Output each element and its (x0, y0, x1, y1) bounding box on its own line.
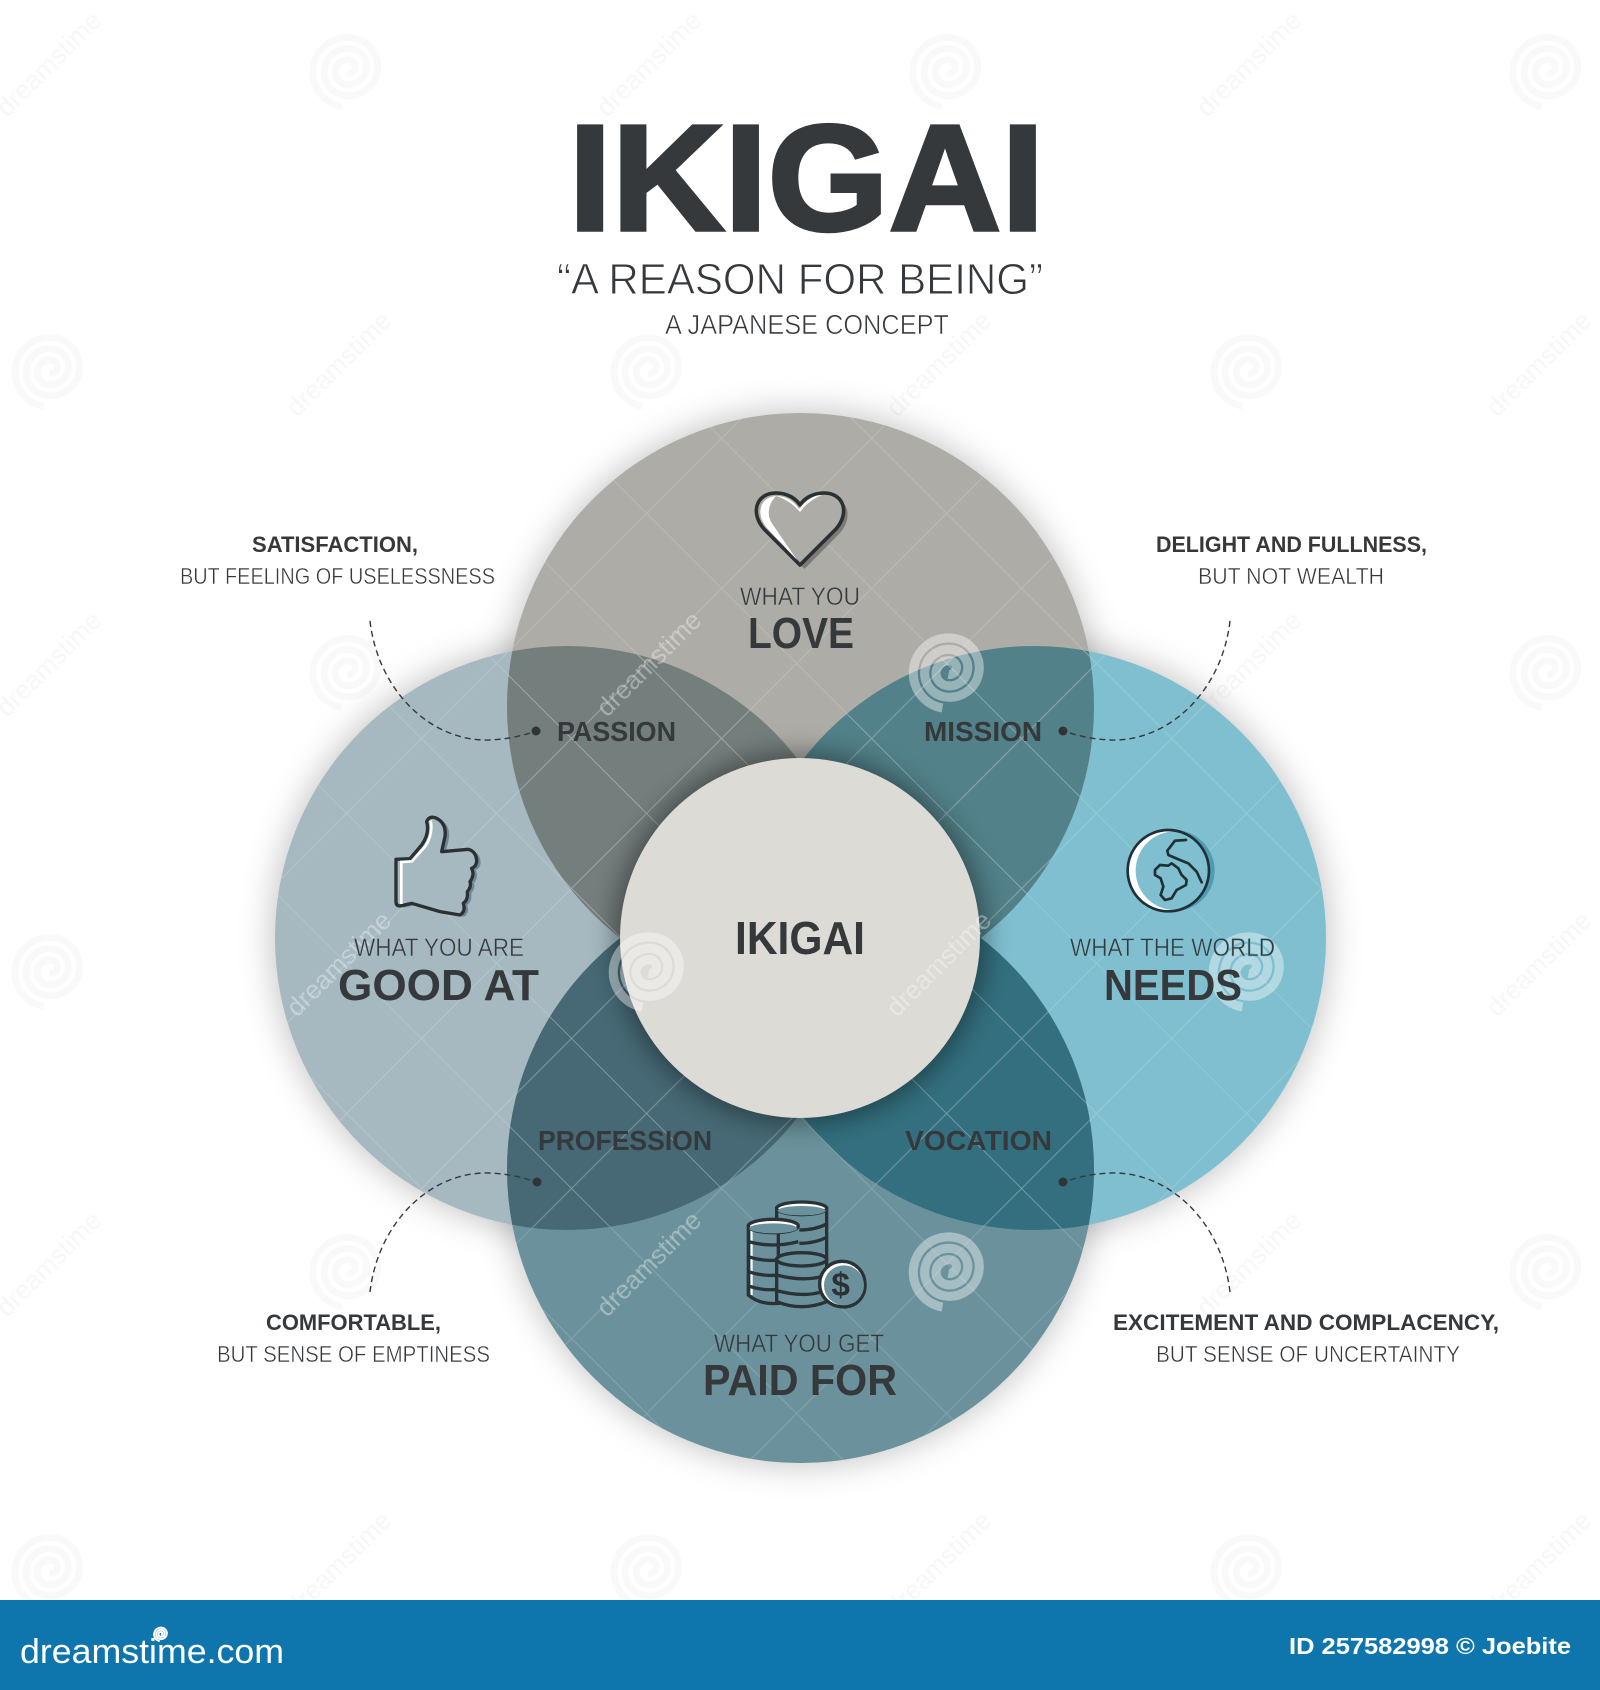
label: what the world: WHAT THE WORLD (1070, 934, 1275, 962)
footer credit: ID 257582998 © Joebite (1289, 1633, 1571, 1659)
diagram text watermarks: dreamstime (590, 1205, 707, 1322)
diagram watermark lines (508, 418, 1092, 938)
diagram watermark lines bottom (510, 984, 1090, 1460)
page watermark pattern: dreamstime (1190, 1205, 1307, 1322)
connector (370, 1173, 542, 1292)
label: what you: WHAT YOU (740, 583, 860, 611)
circle: what you are good at (275, 646, 859, 1230)
overlap label: vocation: VOCATION (905, 1125, 1052, 1156)
dollar coin: $ (831, 1267, 850, 1304)
title: IKIGAI (568, 93, 1044, 262)
icon: globe (1128, 830, 1215, 911)
overlap: profession (507, 938, 796, 1230)
page watermark pattern: dreamstime (880, 1505, 997, 1622)
page watermark pattern: dreamstime (280, 305, 397, 422)
circle: what the world needs (742, 646, 1326, 1230)
page watermark pattern: dreamstime (1480, 905, 1597, 1022)
panel: what you love (740, 493, 860, 658)
page watermark pattern: dreamstime (1190, 5, 1307, 122)
panel: what the world needs (1070, 830, 1275, 1010)
callout heading: EXCITEMENT AND COMPLACENCY, (1113, 1310, 1499, 1335)
footer logo: dreamstime.com (20, 1633, 284, 1671)
label: good at: GOOD AT (338, 961, 539, 1010)
connector (370, 621, 540, 740)
label: paid for: PAID FOR (703, 1356, 897, 1405)
label: what you get: WHAT YOU GET (714, 1330, 884, 1358)
callout body: BUT SENSE OF UNCERTAINTY (1156, 1341, 1460, 1367)
callout heading: DELIGHT AND FULLNESS, (1156, 532, 1427, 557)
diagram text watermarks (280, 605, 997, 1322)
icon: thumbs up (396, 817, 481, 917)
callout body: BUT FEELING OF USELESSNESS (180, 563, 495, 589)
callout: delight (1058, 532, 1427, 740)
panel: what you are good at (338, 817, 539, 1010)
page watermark pattern: dreamstime (590, 5, 707, 122)
callout body: BUT NOT WEALTH (1198, 563, 1384, 589)
center circle (620, 758, 980, 1118)
front coin stack (777, 1253, 827, 1307)
overlap: vocation (804, 938, 1094, 1230)
diagram text watermarks: dreamstime (280, 905, 397, 1022)
diagram text watermarks: dreamstime (590, 605, 707, 722)
page watermark pattern: dreamstime (1190, 605, 1307, 722)
overlap: passion (507, 646, 797, 938)
connector (1058, 621, 1230, 740)
diagram spiral watermarks (608, 632, 1284, 1312)
page watermark pattern: dreamstime (880, 305, 997, 422)
subtitle: “A REASON FOR BEING” (557, 255, 1043, 304)
panel: what you get paid for (703, 1202, 897, 1405)
tagline: A JAPANESE CONCEPT (665, 309, 949, 340)
diagram watermark lines left (278, 652, 792, 1228)
page watermark pattern: dreamstime (1480, 1505, 1597, 1622)
overlap label: profession: PROFESSION (538, 1125, 712, 1156)
center label: IKIGAI (735, 912, 865, 964)
label: needs: NEEDS (1104, 961, 1242, 1010)
circle: what you love (507, 413, 1094, 1000)
overlap label: passion: PASSION (557, 716, 676, 747)
callout body: BUT SENSE OF EMPTINESS (217, 1341, 490, 1367)
page watermark pattern: dreamstime (1480, 305, 1597, 422)
label: love: LOVE (748, 609, 854, 658)
footer bar (0, 1600, 1600, 1690)
icon: coin stacks (748, 1202, 867, 1309)
diagram watermark lines right (817, 650, 1322, 1229)
left coin stack (748, 1219, 798, 1304)
center circle shadow (614, 752, 986, 1124)
callout heading: SATISFACTION, (252, 532, 418, 557)
overlap label: mission: MISSION (924, 716, 1042, 747)
diagram text watermarks: dreamstime (880, 905, 997, 1022)
callout: satisfaction (180, 532, 540, 740)
callout: excitement (1058, 1173, 1499, 1367)
venn circle shadows (271, 410, 1330, 1466)
callout: comfortable (217, 1173, 542, 1367)
circle: what you get paid for (507, 876, 1094, 1463)
connector (1058, 1173, 1230, 1292)
callout heading: COMFORTABLE, (266, 1310, 441, 1335)
page watermark pattern: dreamstime (280, 1505, 397, 1622)
label: what you are: WHAT YOU ARE (354, 934, 524, 962)
icon: heart (756, 493, 848, 569)
overlap: mission (804, 646, 1094, 938)
back coin stack (777, 1202, 827, 1257)
